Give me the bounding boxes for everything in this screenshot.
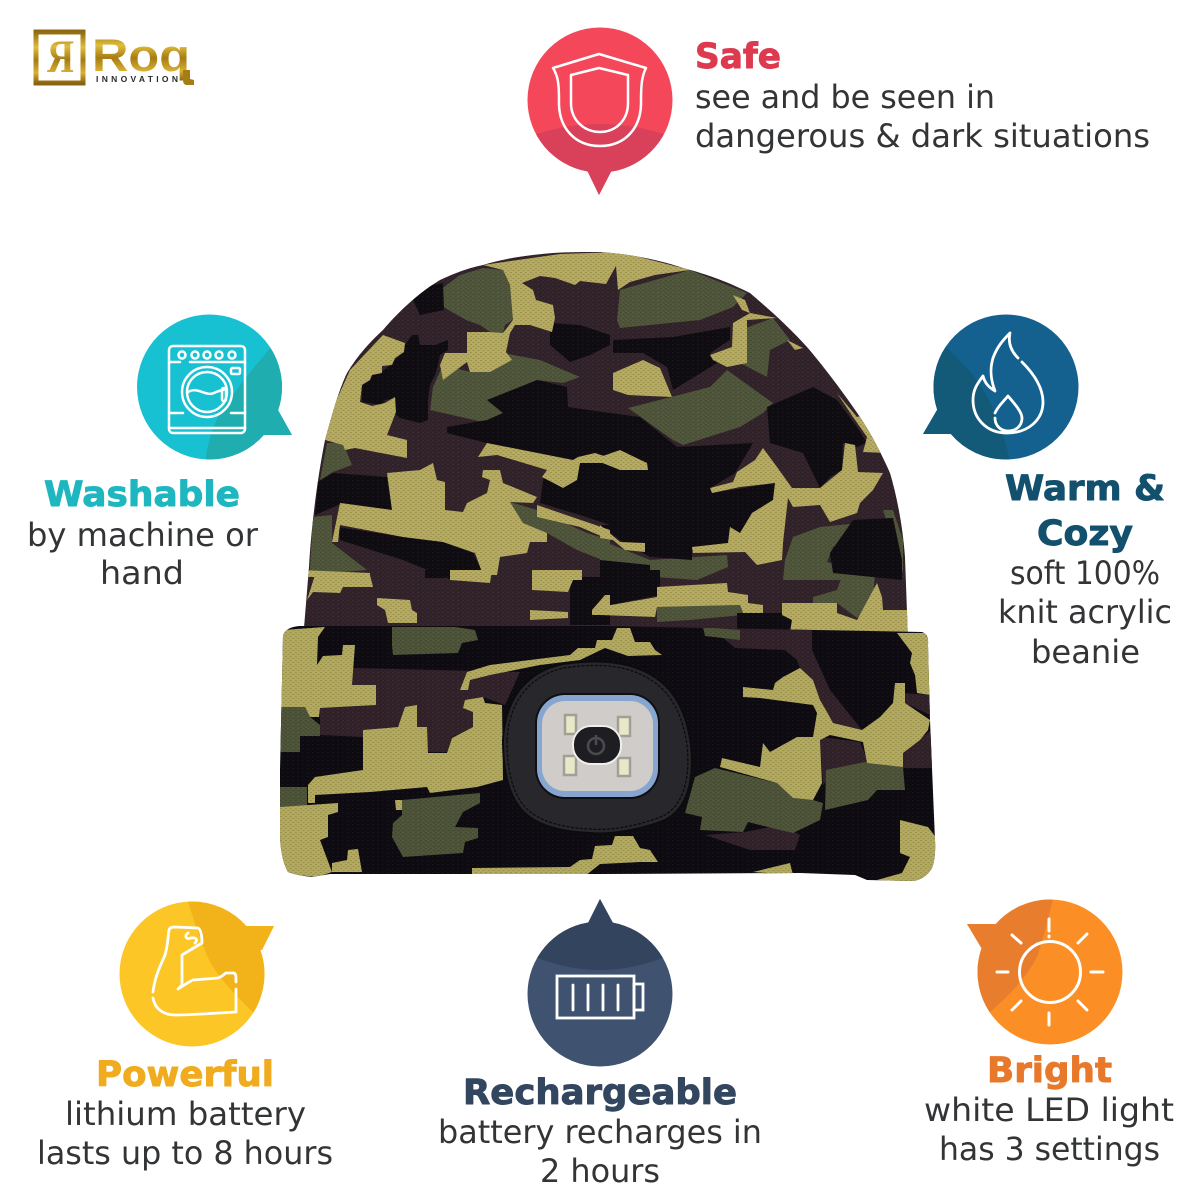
heading: Powerful: Powerful	[96, 1055, 274, 1095]
panel: Washable	[27, 305, 300, 592]
lens rim	[537, 695, 658, 797]
patch stitching	[507, 665, 688, 829]
heading: Warm & Cozy	[1005, 469, 1165, 554]
text: powerful description: lasts up to 8 hours	[37, 1134, 333, 1172]
lens outer shadow	[535, 693, 660, 799]
icon: battery	[557, 976, 643, 1018]
text: safe description	[695, 78, 1150, 155]
heading: Rechargeable: Rechargeable	[463, 1073, 737, 1113]
icon: flame	[973, 333, 1043, 433]
icon: washing machine	[169, 346, 245, 433]
logo: Roq Innovation	[36, 30, 194, 85]
text: warm description: beanie	[1031, 633, 1140, 671]
panel: Rechargeable	[438, 890, 762, 1190]
panel: Warm & Cozy	[915, 305, 1172, 671]
text: safe description: dangerous & dark situations	[695, 117, 1150, 155]
crown camo olive	[310, 268, 903, 622]
text: bright description: has 3 settings	[939, 1130, 1160, 1168]
cuff camo olive	[280, 627, 905, 857]
speech bubble	[528, 28, 672, 195]
speech bubble	[923, 314, 1078, 460]
lens plate	[542, 701, 653, 791]
panel: camouflage LED beanie	[270, 245, 950, 890]
leather patch	[503, 661, 692, 833]
panel: Bright	[924, 890, 1174, 1168]
text: powerful description	[37, 1095, 333, 1172]
text: rechargeable description	[438, 1113, 762, 1190]
LED headlamp module	[503, 661, 692, 833]
text: bright description: white LED light	[924, 1091, 1174, 1129]
text: bright description	[924, 1091, 1174, 1168]
heading: Bright: Bright	[987, 1051, 1112, 1091]
text: washable description	[27, 516, 259, 592]
power button	[573, 726, 621, 764]
icon: flexed arm	[153, 927, 236, 1015]
text: warm description	[998, 554, 1172, 671]
text: warm description: soft 100%	[1010, 554, 1160, 592]
text: rechargeable description: battery recharges in	[438, 1113, 762, 1151]
logo: Roq Innovation: Roq	[92, 30, 190, 81]
beanie folded cuff	[270, 620, 950, 890]
panel: Powerful	[37, 895, 333, 1172]
LEDs	[564, 715, 630, 776]
speech bubble	[120, 902, 274, 1046]
cuff camo brown	[320, 627, 932, 850]
text: powerful description: lithium battery	[65, 1095, 306, 1133]
heading: Warm & Cozy: Cozy	[1037, 514, 1133, 554]
heading: Warm & Cozy: Warm &	[1005, 469, 1165, 509]
speech bubble	[137, 314, 292, 460]
crown camo black	[315, 283, 902, 630]
text: rechargeable description: 2 hours	[540, 1152, 660, 1190]
text: washable description: hand	[100, 554, 184, 592]
text: warm description: knit acrylic	[998, 593, 1172, 631]
heading: Washable: Washable	[44, 475, 240, 515]
text: safe description: see and be seen in	[695, 78, 995, 116]
heading: Safe: Safe	[695, 37, 781, 77]
speech bubble	[967, 900, 1122, 1044]
cuff camo khaki	[278, 627, 938, 882]
icon: shield	[553, 54, 646, 146]
logo: Roq Innovation: INNOVATION	[96, 74, 178, 84]
logo: Roq Innovation: Я	[47, 31, 74, 83]
beanie crown	[290, 245, 920, 645]
speech bubble	[528, 899, 672, 1066]
crown camo khaki	[300, 252, 908, 632]
text: washable description: by machine or	[27, 516, 259, 554]
panel: Safe	[520, 20, 1150, 200]
icon: sun	[997, 919, 1103, 1025]
